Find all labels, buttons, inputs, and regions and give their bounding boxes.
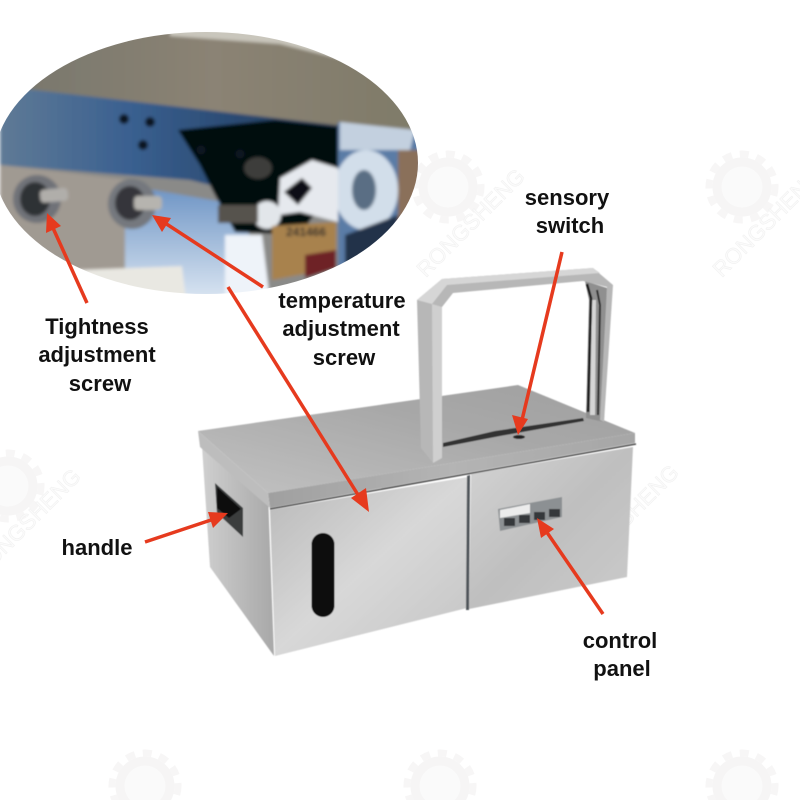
machine: door gap bbox=[466, 475, 470, 610]
inset: blue reflective plate bbox=[0, 88, 339, 186]
machine: door slot bbox=[312, 533, 334, 617]
label: tightness adjustment screw: adjustment bbox=[38, 342, 156, 367]
label: sensory switch: sensory bbox=[525, 185, 610, 210]
label: temperature adjustment screw: screw bbox=[313, 345, 376, 370]
arrows bbox=[46, 213, 603, 614]
inset: drill holes bbox=[119, 114, 244, 158]
machine: front lip bbox=[268, 433, 635, 508]
machine bbox=[198, 268, 636, 656]
inset: upper steel band bbox=[30, 34, 410, 130]
arrow: tightness screw bbox=[46, 213, 87, 303]
arrow: sensory switch bbox=[512, 252, 562, 435]
machine: table channel bbox=[443, 418, 584, 447]
machine: arch frame bbox=[417, 268, 613, 463]
arrow: control panel bbox=[537, 518, 603, 614]
machine: control panel bbox=[498, 497, 562, 531]
label: temperature adjustment screw: temperature bbox=[278, 288, 406, 313]
machine: top plate bbox=[198, 385, 635, 493]
label: tightness adjustment screw: screw bbox=[69, 371, 132, 396]
inset: right screw bbox=[108, 179, 162, 229]
arrow: long pointer to door bbox=[228, 287, 369, 512]
inset: right lens bracket bbox=[334, 121, 418, 266]
label: handle: handle bbox=[62, 535, 132, 560]
machine: right door bbox=[469, 447, 633, 609]
inset photo: close-up of adjustment screws: 241466 bbox=[286, 225, 326, 239]
label: control panel: panel bbox=[593, 656, 651, 681]
machine: left side panel bbox=[202, 446, 274, 656]
inset: chrome latch bbox=[278, 160, 338, 222]
machine: handle cutout bbox=[215, 483, 243, 537]
inset: brass label bbox=[272, 222, 336, 280]
label: tightness adjustment screw: Tightness bbox=[45, 314, 149, 339]
label: temperature adjustment screw: adjustment bbox=[282, 316, 400, 341]
watermarks: RONGSHENG bbox=[412, 164, 530, 282]
inset: lower left grey panel bbox=[0, 164, 126, 270]
inset: lower center light reflection bbox=[122, 188, 252, 294]
machine: left door bbox=[270, 477, 468, 656]
inset photo: close-up of adjustment screws bbox=[0, 32, 418, 294]
inset: white sticker bbox=[80, 264, 186, 294]
watermarks: RONGSHENG bbox=[566, 460, 684, 578]
arrow: temperature screw bbox=[152, 215, 263, 287]
inset: left screw bbox=[13, 175, 69, 223]
inset: dark cavity bbox=[178, 120, 345, 235]
machine: sensor slot bbox=[513, 435, 525, 439]
arrow: handle bbox=[145, 512, 228, 542]
label: sensory switch: switch bbox=[536, 213, 604, 238]
label: control panel: control bbox=[583, 628, 657, 653]
